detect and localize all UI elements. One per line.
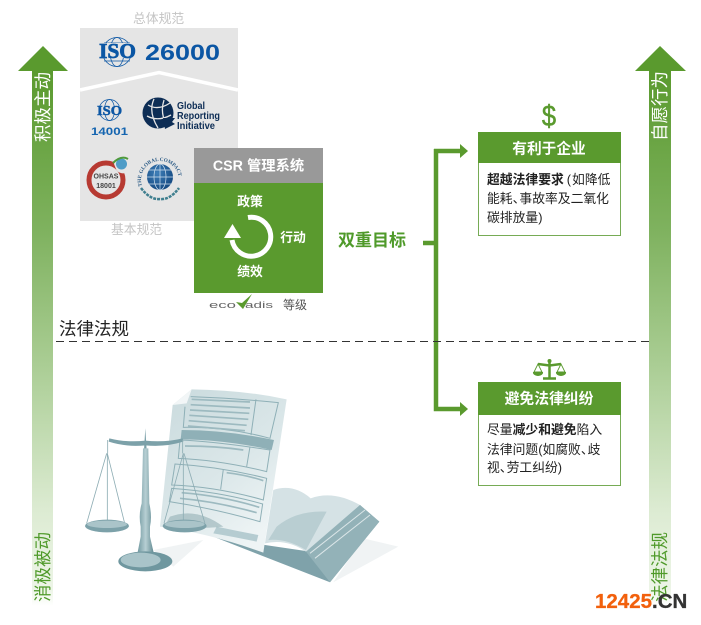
panel heading: 有利于企业	[512, 140, 586, 158]
logo: OHSAS 18001: 18001	[96, 183, 116, 190]
watermark: 12425.CN: 12425.CN	[595, 590, 687, 613]
logo: ISO 26000	[99, 38, 220, 66]
body text: 法律问题(如腐败、	[487, 442, 594, 457]
label: policy: 政策	[237, 194, 263, 209]
panel: CSR management system	[194, 148, 323, 293]
logo: ISO 26000: 26000	[145, 40, 220, 65]
body text: (如降低	[567, 172, 610, 187]
label: voluntary: 自愿行为	[650, 71, 670, 141]
logo: The Global Compact: THE GLOBAL COMPACT	[138, 158, 182, 187]
ground shadows	[153, 538, 398, 582]
icon: cycle arrow	[224, 217, 271, 256]
logo: EcoVadis rating	[209, 294, 307, 312]
heading: laws and regulations: 法律法规	[59, 319, 129, 339]
document	[160, 389, 287, 553]
logo: ISO 14001: 14001	[91, 126, 128, 138]
logo: OHSAS 18001: OHSAS	[94, 174, 119, 180]
panel: avoid legal disputes	[478, 382, 621, 486]
body text: 能耗、	[487, 191, 525, 206]
label: proactive: 积极主动	[33, 72, 53, 142]
label: legal compliance: 法律法规	[650, 532, 670, 602]
body text: 超越法律要求	[487, 172, 564, 187]
body text: 视、	[487, 460, 513, 475]
label: action: 行动	[280, 230, 306, 245]
logo: ISO 14001	[91, 100, 128, 138]
body text: 减少和避免陷入	[513, 422, 602, 437]
panel: benefit business	[478, 132, 621, 236]
label: performance: 绩效	[237, 264, 263, 279]
body text: 事故率及二氧化	[519, 191, 609, 206]
logo: EcoVadis rating: eco	[209, 300, 236, 311]
panel title: CSR 管理系统	[213, 156, 304, 174]
heading: general standards: 总体规范	[133, 11, 184, 26]
logo: EcoVadis rating: adis	[245, 300, 273, 311]
panel: standards	[80, 28, 238, 221]
logo: The Global Compact	[138, 158, 182, 200]
logo: ISO 14001: ISO	[97, 103, 122, 118]
logo: Global Reporting Initiative: Reporting	[177, 110, 220, 122]
arrows: branching to two goals	[423, 144, 468, 416]
body text: 歧	[588, 442, 601, 457]
logo: OHSAS 18001	[89, 158, 130, 197]
body text: 碳排放量)	[487, 210, 542, 225]
icon: scales	[533, 359, 566, 378]
logo: EcoVadis rating: 等级	[283, 298, 307, 312]
logo: Global Reporting Initiative	[142, 98, 220, 132]
scales	[85, 428, 207, 571]
logo: Global Reporting Initiative: Global	[177, 100, 205, 112]
label: passive: 消极被动	[33, 532, 53, 602]
illustration: scales, document and book	[85, 389, 398, 582]
heading: basic standards: 基本规范	[111, 222, 162, 237]
icon: dollar: $	[542, 99, 557, 132]
logo: ISO 26000: ISO	[99, 39, 136, 63]
arrow: proactive (left)	[18, 46, 68, 606]
logo: Global Reporting Initiative: Initiative	[177, 120, 215, 132]
panel heading: 避免法律纠纷	[505, 390, 594, 408]
body text: 尽量	[487, 422, 513, 437]
heading: dual goals: 双重目标	[338, 231, 406, 250]
arrow: voluntary (right)	[635, 46, 686, 606]
body text: 劳工纠纷)	[507, 460, 562, 475]
book	[213, 488, 379, 582]
